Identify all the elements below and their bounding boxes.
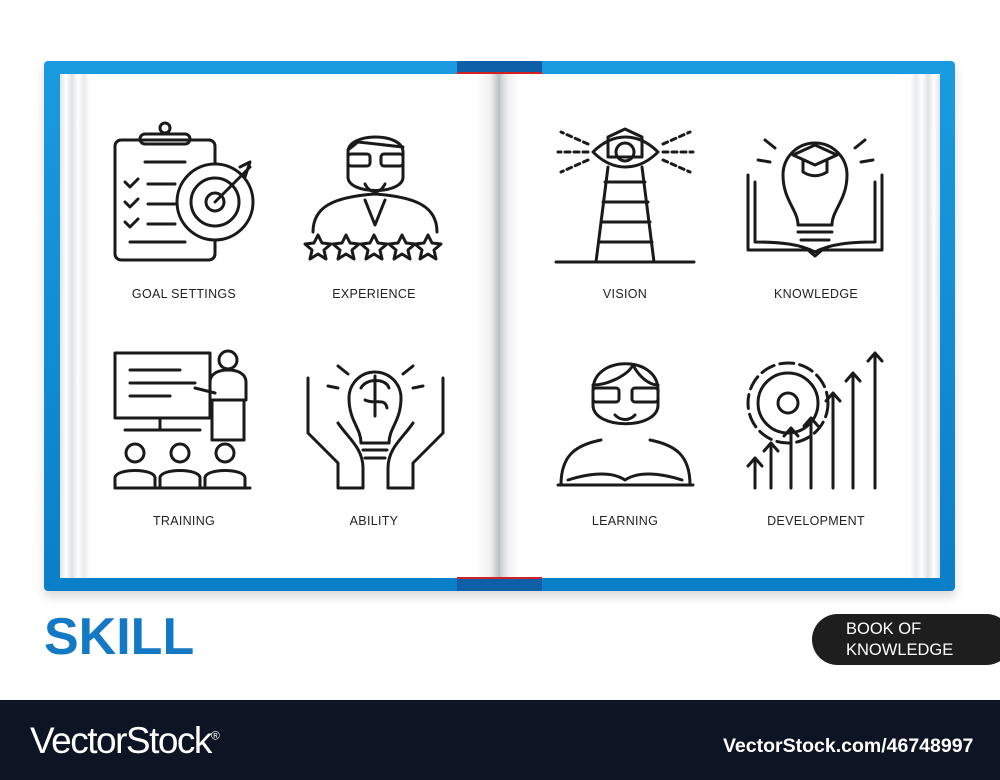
label: experience: EXPERIENCE bbox=[332, 287, 416, 301]
icon: learning bbox=[556, 362, 694, 486]
book cover bbox=[44, 61, 955, 591]
badge: book of knowledge: BOOK OF bbox=[846, 620, 921, 638]
label: learning: LEARNING bbox=[592, 514, 658, 528]
left page bbox=[60, 74, 500, 578]
label: vision: VISION bbox=[603, 287, 647, 301]
badge: book of knowledge bbox=[812, 614, 1000, 665]
footer bar bbox=[0, 700, 1000, 780]
label: ability: ABILITY bbox=[350, 514, 398, 528]
label: development: DEVELOPMENT bbox=[767, 514, 865, 528]
label: training: TRAINING bbox=[153, 514, 215, 528]
icon: training bbox=[114, 350, 252, 490]
icon: ability bbox=[306, 364, 444, 490]
label: goal settings: GOAL SETTINGS bbox=[132, 287, 236, 301]
footer url: VectorStock.com/46748997 bbox=[723, 735, 973, 757]
icon: goal settings bbox=[114, 122, 254, 262]
badge: book of knowledge: KNOWLEDGE bbox=[846, 641, 953, 659]
title: SKILL bbox=[44, 608, 194, 666]
icon: vision bbox=[554, 128, 696, 264]
spine bookmark bbox=[457, 61, 542, 591]
icon: development bbox=[746, 351, 884, 490]
icon: knowledge bbox=[746, 138, 884, 258]
right page bbox=[500, 74, 940, 578]
icon: experience bbox=[303, 136, 442, 261]
label: knowledge: KNOWLEDGE bbox=[774, 287, 858, 301]
footer logo: VectorStock® bbox=[30, 720, 218, 761]
